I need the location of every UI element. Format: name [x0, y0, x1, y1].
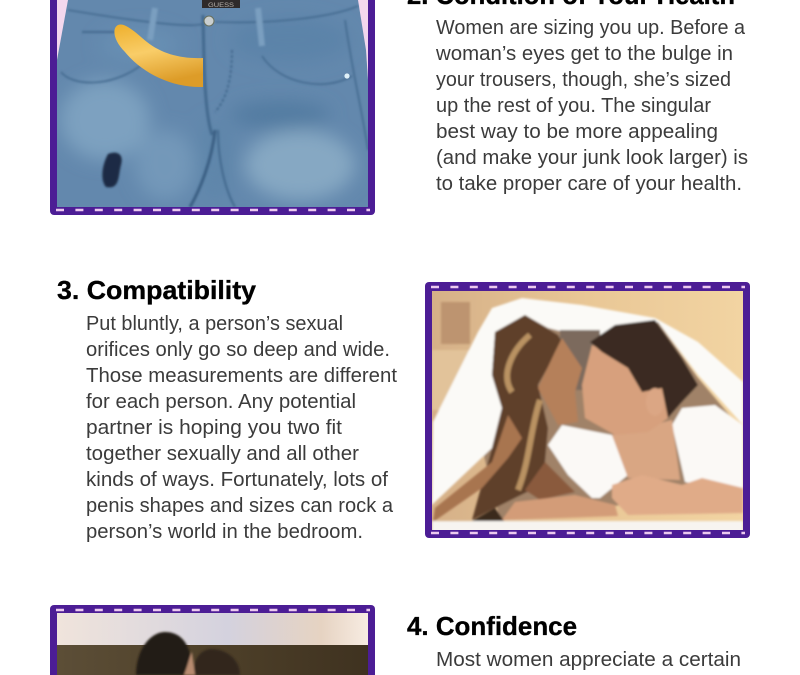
heading: compatibility: 3. Compatibility	[57, 275, 257, 305]
text block: compatibility: kinds of ways. Fortunately, lots of	[86, 469, 388, 491]
woman face	[538, 338, 582, 425]
text block: condition of your health: (and make your junk look larger) is	[436, 147, 748, 169]
couple heads	[136, 632, 240, 675]
man hair	[590, 320, 698, 418]
woman forearm	[502, 495, 618, 520]
text block: condition of your health: best way to be more appealing	[436, 121, 718, 143]
man arm	[612, 475, 743, 515]
heading: confidence: 4. Confidence	[407, 611, 577, 641]
text block: compatibility: Put bluntly, a person’s sexual	[86, 313, 343, 335]
man shirt	[548, 425, 628, 498]
text block: condition of your health: Women are sizing you up. Before a	[436, 17, 746, 39]
text block: compatibility	[86, 313, 397, 543]
text block: condition of your health: to take proper care of your health.	[436, 173, 742, 195]
text block: condition of your health: woman’s eyes get to the bulge in	[435, 43, 733, 65]
banana	[114, 24, 203, 87]
ceiling	[57, 613, 368, 646]
man ear	[649, 386, 658, 392]
text block: compatibility: person’s world in the bedroom.	[86, 521, 363, 543]
man face	[582, 345, 668, 435]
text block: compatibility: together sexually and all other	[86, 443, 359, 465]
woman arm	[433, 415, 522, 522]
bedroom background	[432, 291, 743, 530]
belt label: GUESS	[208, 3, 234, 9]
text block: compatibility: orifices only go so deep and wide.	[86, 339, 390, 361]
text block: compatibility: penis shapes and sizes can rock a	[86, 495, 394, 517]
text block: condition of your health: your trousers, though, she’s sized	[436, 69, 731, 91]
text block: condition of your health: up the rest of you. The singular	[436, 95, 711, 117]
woman hair	[472, 315, 562, 520]
text block: compatibility: for each person. Any potential	[86, 391, 356, 413]
jeans tear	[102, 153, 122, 187]
photo panel: jeans with banana	[50, 0, 375, 215]
text block: confidence: Most women appreciate a certain	[436, 649, 741, 671]
text block: compatibility: Those measurements are different	[86, 365, 397, 387]
stitched dashes	[55, 209, 370, 211]
bed sheet	[432, 521, 743, 533]
text block: compatibility: partner is hoping you two fit	[86, 417, 342, 439]
text block: condition of your health	[435, 17, 748, 195]
white sheet	[432, 298, 743, 505]
photo panel: couple kissing under sheet	[425, 282, 750, 538]
jeans denim	[57, 0, 368, 207]
dark hair ends	[470, 508, 505, 522]
woman shoulder	[525, 462, 575, 500]
top dashes	[55, 609, 370, 611]
belt label	[202, 0, 240, 8]
wall	[57, 645, 368, 675]
space under sheet	[480, 315, 742, 520]
jeans button	[204, 16, 214, 26]
bottom dashes	[430, 532, 745, 534]
top dashes	[430, 286, 745, 288]
gap between faces	[560, 330, 600, 390]
pocket rivet	[344, 73, 350, 79]
man neck and chest	[612, 420, 680, 480]
photo panel: couple embracing	[50, 605, 375, 675]
